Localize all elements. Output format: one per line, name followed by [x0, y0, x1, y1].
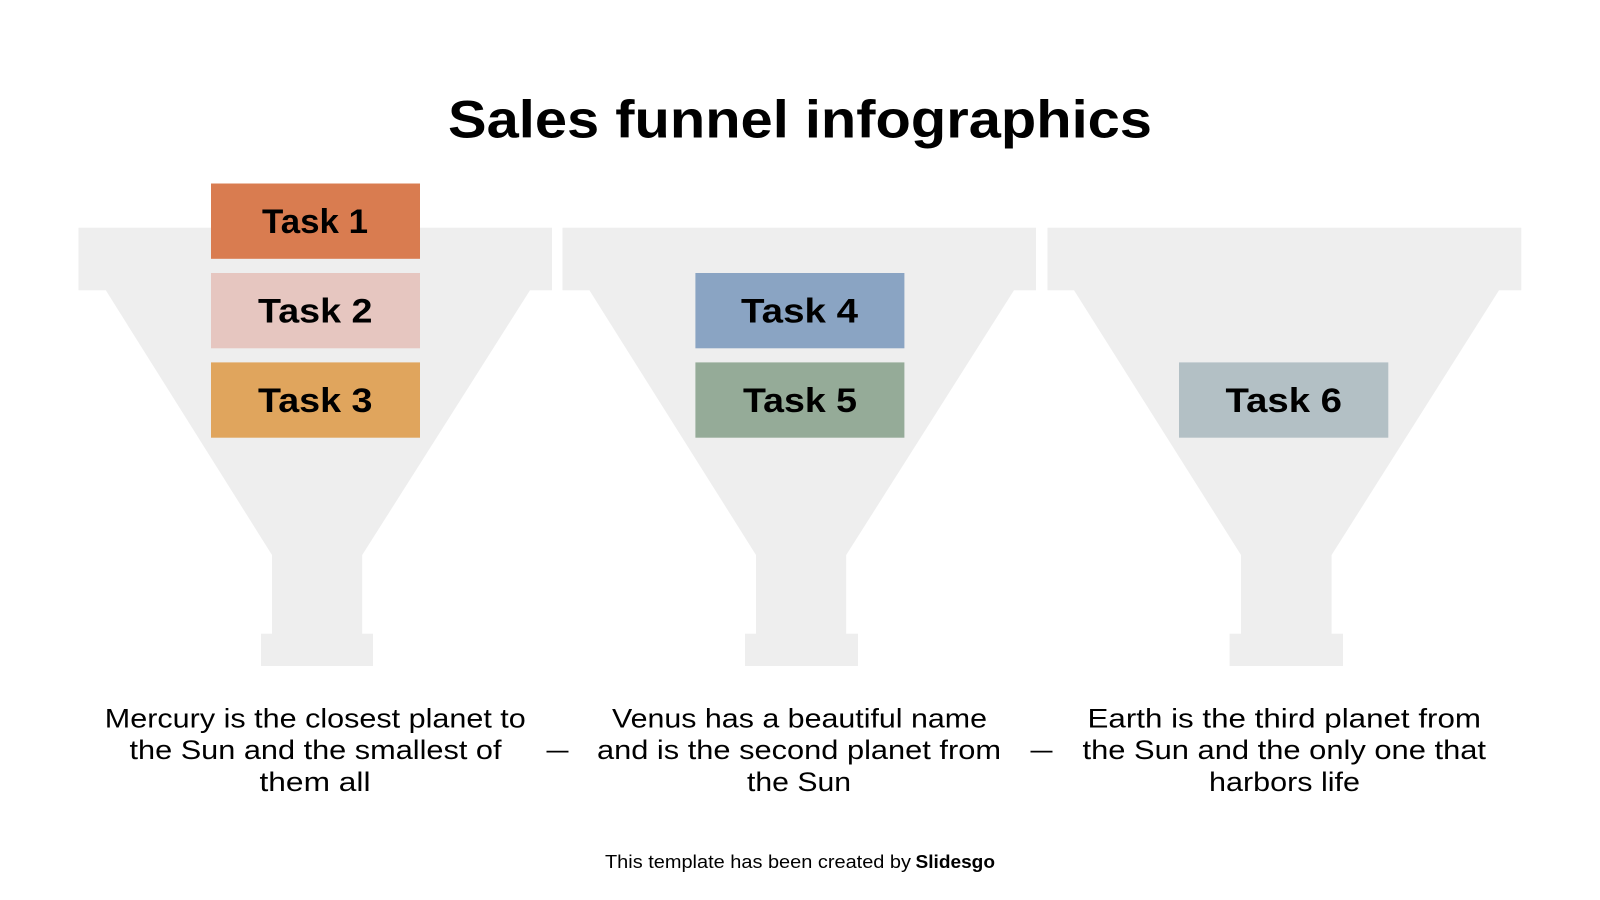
dash connector 1: —: [546, 734, 569, 764]
footer credit: This template has been created by: [605, 851, 912, 872]
funnel shape 2: [562, 228, 1036, 666]
task 4 box: [695, 273, 904, 348]
description 2: [597, 703, 1001, 797]
description 2: Venus has a beautiful name: [612, 703, 987, 733]
task 4 box: Task 4: [741, 292, 858, 330]
footer credit: Slidesgo: [916, 851, 995, 872]
panel: funnel 1: [78, 184, 552, 797]
task 3 box: Task 3: [258, 382, 372, 420]
task 6 box: Task 6: [1226, 382, 1342, 420]
task 3 box: [211, 362, 420, 438]
description 3: [1082, 703, 1487, 797]
task 2 box: [211, 273, 420, 348]
description 3: harbors life: [1209, 767, 1360, 797]
description 3: Earth is the third planet from: [1088, 703, 1481, 733]
panel: funnel 3: [1048, 228, 1521, 797]
task 1 box: Task 1: [262, 203, 368, 241]
task 5 box: [695, 362, 904, 438]
description 1: the Sun and the smallest of: [130, 735, 502, 765]
description 1: [105, 703, 526, 797]
task 1 box: [211, 184, 420, 259]
title: Sales funnel infographics: [448, 90, 1152, 150]
description 2: and is the second planet from: [597, 735, 1001, 765]
description 1: them all: [260, 767, 370, 797]
description 2: the Sun: [747, 767, 851, 797]
funnel shape 3: [1048, 228, 1521, 666]
description 1: Mercury is the closest planet to: [105, 703, 526, 733]
task 6 box: [1179, 362, 1388, 438]
description 3: the Sun and the only one that: [1082, 735, 1487, 765]
panel: funnel 2: [562, 228, 1036, 797]
dash connector 2: —: [1030, 734, 1053, 764]
funnel shape 1: [78, 228, 552, 666]
task 5 box: Task 5: [743, 382, 857, 420]
task 2 box: Task 2: [258, 292, 372, 330]
